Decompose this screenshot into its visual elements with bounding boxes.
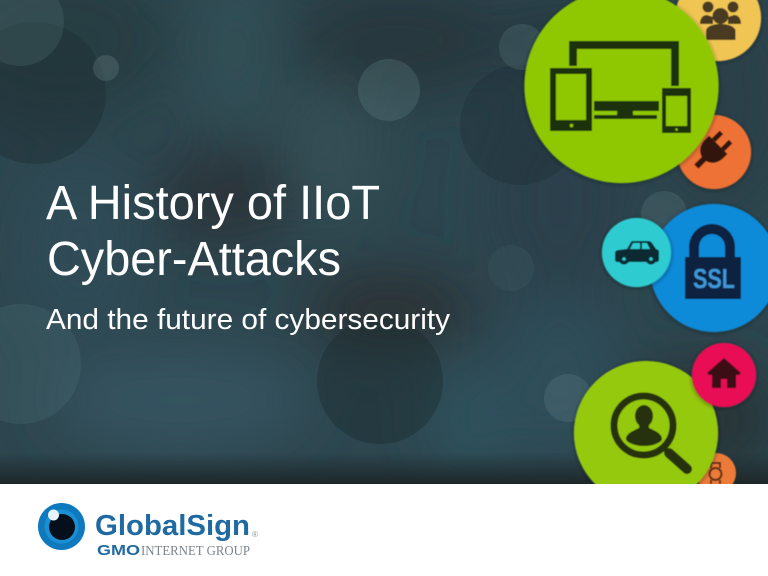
icon circle: devices (large green) — [524, 0, 718, 183]
title: A History of IIoT — [46, 177, 380, 230]
icon circle: house (red) — [692, 343, 756, 407]
wordmark: GlobalSign — [95, 510, 250, 542]
icon circle: user search (lime) — [572, 360, 720, 484]
icon circle: car (cyan) — [602, 218, 671, 287]
icon circle: people (yellow) — [675, 0, 761, 61]
GMO tagline: GMO — [97, 542, 140, 559]
title: Cyber-Attacks — [47, 233, 341, 286]
icon circle: plug (orange) — [677, 115, 751, 189]
decorative background bubbles — [0, 0, 687, 444]
icon: eye — [38, 503, 85, 550]
registered mark: ® — [252, 530, 258, 539]
icon circle: SSL padlock (blue) — [650, 204, 768, 332]
subtitle: And the future of cybersecurity — [46, 304, 451, 336]
icon circle: watch (orange) — [698, 452, 737, 484]
panel: white footer — [0, 484, 768, 576]
logo: GlobalSign eye and wordmark — [38, 503, 258, 559]
icon circle: SSL padlock (blue): SSL — [693, 263, 735, 294]
internet group tagline: INTERNET GROUP — [141, 544, 250, 559]
